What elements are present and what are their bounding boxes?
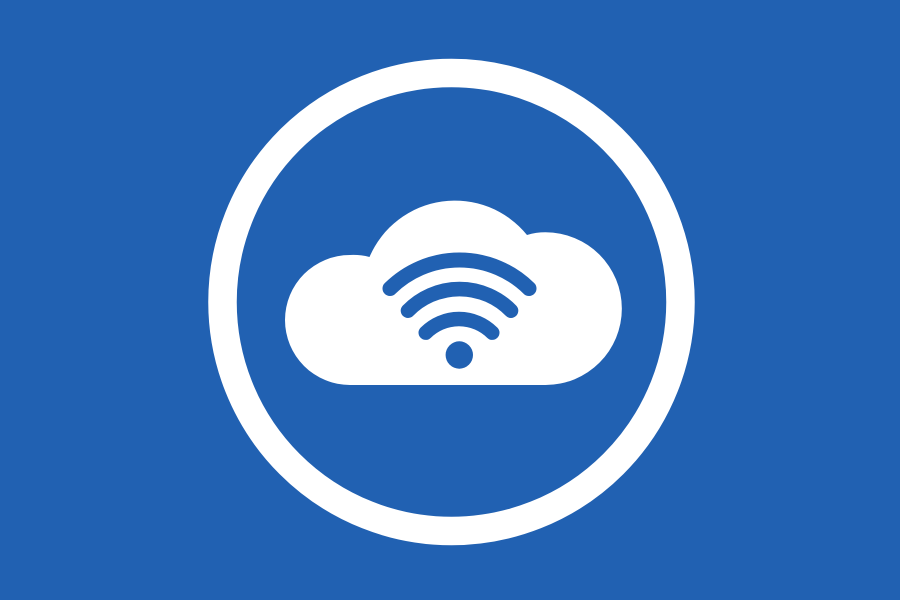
wifi arc: middle <box>408 289 511 311</box>
wifi arc: outer <box>390 260 529 288</box>
icon: white ring <box>222 73 680 531</box>
icon: wifi signal <box>390 260 529 369</box>
icon: cloud <box>285 201 622 385</box>
wifi arc: inner <box>426 319 492 333</box>
icon: cloud with wifi signal <box>285 201 622 385</box>
wifi dot <box>446 341 473 369</box>
